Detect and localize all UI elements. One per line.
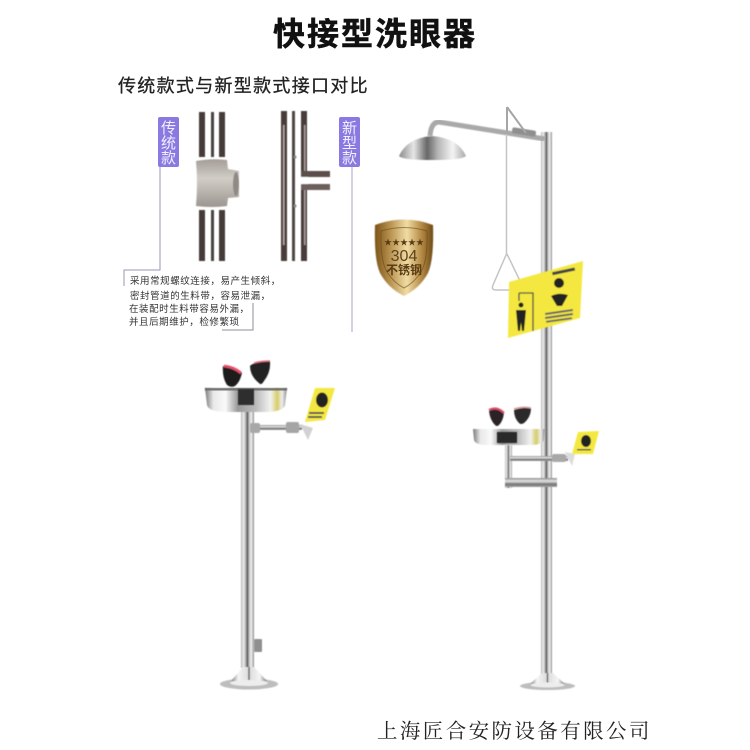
icon: 304 stainless steel gold shield badge [375, 220, 433, 296]
pull rod bracket [507, 107, 526, 134]
pole base [520, 673, 575, 690]
main pole [541, 132, 552, 678]
label: traditional style: 传 [161, 120, 176, 137]
stem valve knob [254, 639, 262, 652]
label: new style: 款 [342, 150, 357, 167]
callout: traditional style description: 并且后期维护，检修繁琐 [129, 316, 240, 328]
callout: traditional style description: 在装配时生料带容易外漏， [129, 303, 250, 315]
bowl label [497, 432, 517, 443]
icon: shower head [399, 136, 466, 160]
label: traditional style: 款 [161, 150, 176, 167]
eyewash bowl [205, 388, 287, 412]
panel: new pipe joint comparison [281, 111, 360, 332]
title: 快接型洗眼器 [273, 16, 477, 52]
icon: threaded tee pipe fitting [196, 112, 239, 261]
eyewash bowl [473, 429, 545, 445]
stem [241, 405, 254, 668]
label: new style: 新 [342, 120, 357, 137]
arm joint collar [512, 127, 536, 137]
warning sign: eyewash hand [305, 388, 335, 422]
callout: traditional style description [124, 167, 281, 330]
subtitle: interface comparison heading: 传统款式与新型款式接口对比 [118, 76, 369, 96]
panel: standalone eyewash station [205, 361, 335, 690]
panel: combination shower and eyewash station [399, 107, 599, 690]
label: new style: 型 [342, 135, 357, 152]
panel: traditional pipe joint comparison [124, 112, 281, 330]
icon: eyewash nozzles [223, 361, 270, 387]
supply pipes [505, 445, 575, 488]
pull rod and triangle handle [492, 134, 523, 290]
valve arm and paddle [250, 422, 313, 440]
callout: traditional style description: 采用常规螺纹连接，易产生倾斜， [130, 275, 281, 287]
icon: 304 stainless steel gold shield badge: ★★★★★ [384, 238, 424, 247]
shower arm [430, 122, 545, 139]
label: new style [339, 117, 360, 167]
stem base [220, 667, 278, 690]
bowl rim [205, 388, 287, 390]
icon: eyewash nozzles [489, 407, 531, 426]
bowl label [238, 389, 254, 405]
icon: 304 stainless steel gold shield badge: 304 [391, 248, 417, 265]
leader line: new style [351, 167, 353, 332]
label: traditional style: 统 [161, 135, 176, 152]
callout: traditional style description: 密封管道的生料带，容易泄漏， [130, 290, 271, 302]
warning sign: eyewash hand [572, 431, 599, 454]
label: traditional style [158, 117, 179, 167]
icon: welded quick-connect pipe [281, 111, 330, 261]
footer: company name: 上海匠合安防设备有限公司 [377, 720, 652, 743]
icon: 304 stainless steel gold shield badge: 不锈钢 [386, 262, 422, 277]
warning sign: shower [508, 261, 583, 338]
